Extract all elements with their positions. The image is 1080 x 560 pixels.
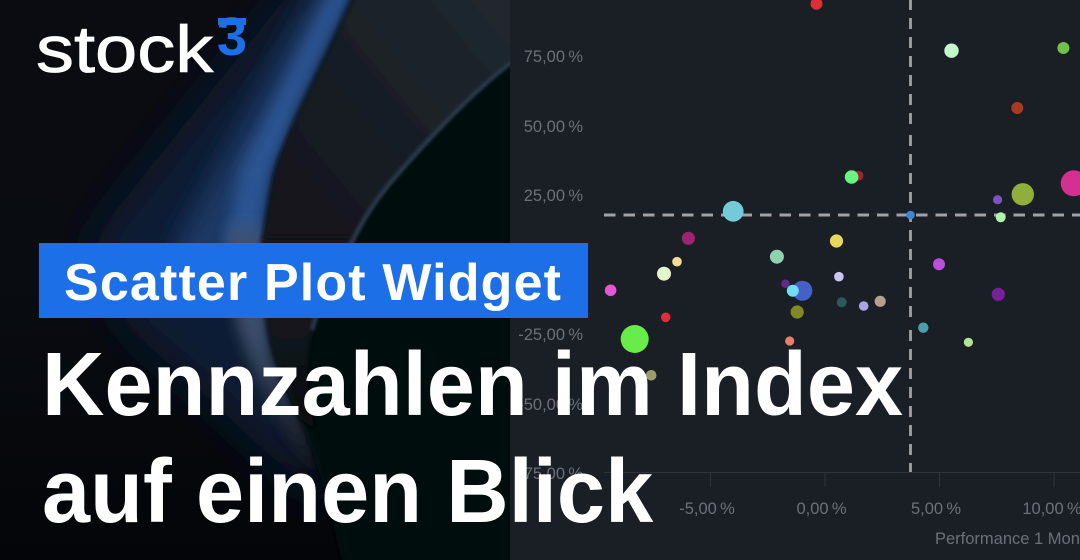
x axis labels (679, 500, 1080, 518)
median crosshair dashed lines (604, 0, 1080, 472)
background: dark abstract light streaks (78, 0, 510, 560)
tag: Scatter Plot Widget: Scatter Plot Widget (64, 254, 562, 312)
title line 2: auf einen Blick (42, 442, 653, 542)
x axis labels: 10,00 % (1022, 500, 1080, 518)
title line 1: Kennzahlen im Index (42, 335, 903, 435)
logo: stock3: 3 (217, 7, 247, 67)
logo: stock3: stock (36, 12, 213, 86)
y axis labels: 50,00 % (524, 118, 583, 136)
y axis labels: -25,00 % (518, 326, 583, 344)
y axis labels (518, 48, 583, 483)
y axis labels: 75,00 % (524, 48, 583, 66)
x axis with ticks (604, 472, 1080, 487)
y axis labels: 25,00 % (524, 187, 583, 205)
x axis labels: 0,00 % (796, 500, 847, 518)
y axis labels: -75,00 % (518, 465, 583, 483)
y axis labels: -50,00 % (518, 396, 583, 414)
scatter points (605, 0, 1080, 381)
x axis labels: 5,00 % (911, 500, 961, 518)
x axis labels: -5,00 % (679, 500, 735, 518)
